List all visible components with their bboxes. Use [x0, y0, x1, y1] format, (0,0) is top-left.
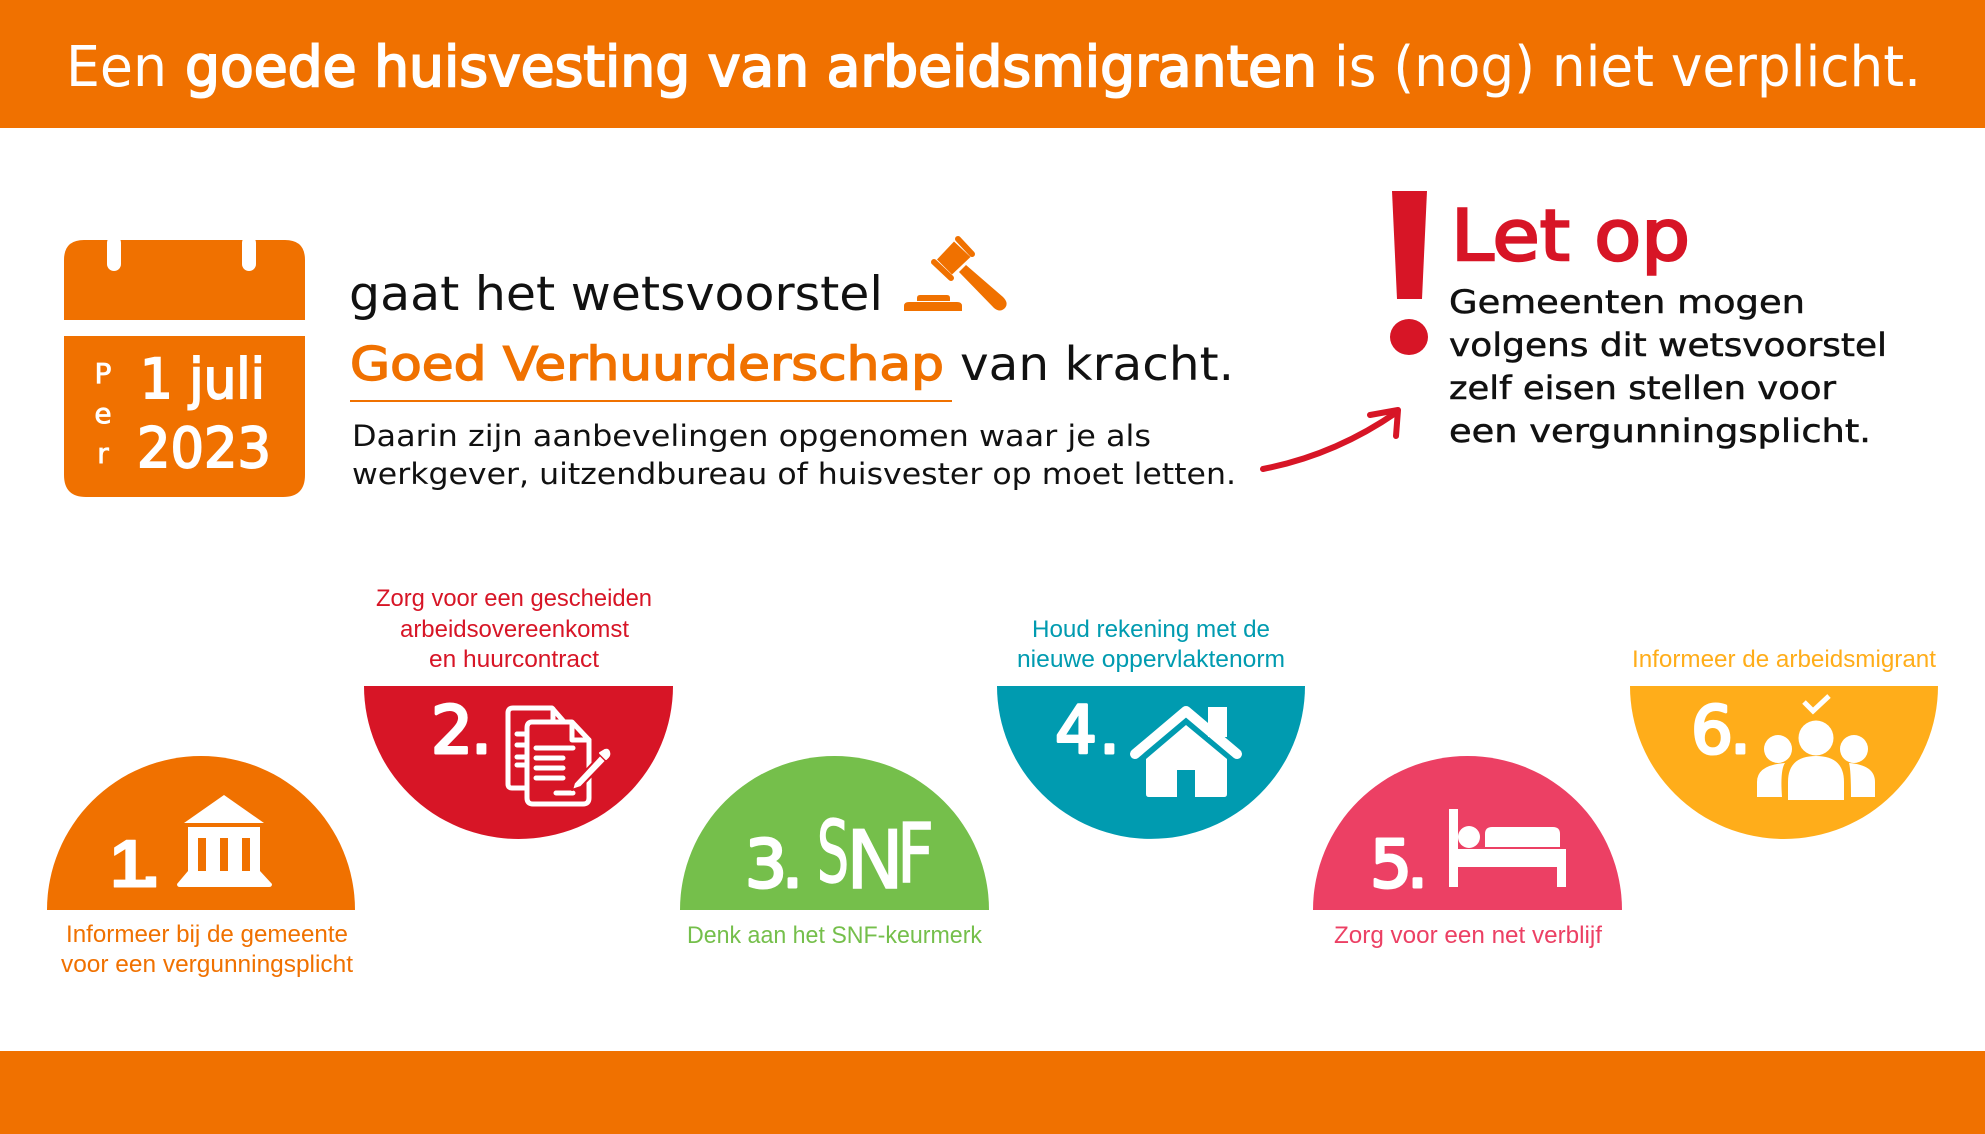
- label 4: [1017, 616, 1285, 673]
- vertical word Per: e: [94, 397, 112, 430]
- title: Een: [66, 35, 167, 100]
- vertical word Per: [94, 357, 112, 470]
- footer band: [0, 1051, 1985, 1134]
- logo: SNF: [817, 803, 934, 907]
- label 6: Informeer de arbeidsmigrant: [1632, 646, 1936, 673]
- arrow: [1263, 410, 1398, 469]
- logo: SNF: S: [817, 803, 849, 903]
- logo: SNF: N: [846, 814, 904, 907]
- label 1: Informeer bij de gemeente: [66, 921, 348, 948]
- icon: bed: [1449, 809, 1566, 887]
- date text: 2023: [137, 416, 271, 480]
- label 1: voor een vergunningsplicht: [61, 951, 353, 978]
- step 2: contracts: [364, 585, 673, 839]
- callout: let op: Let op: [1451, 195, 1690, 277]
- date text: 1 juli: [140, 347, 265, 411]
- text block: explanation: Daarin zijn aanbevelingen opgenomen waar je als: [352, 419, 1151, 453]
- step 3: SNF: [680, 756, 989, 949]
- icon: calendar with date: [64, 236, 305, 497]
- icon: gavel: [904, 239, 1007, 311]
- icon: government building: [177, 795, 272, 887]
- label 2: en huurcontract: [429, 646, 599, 673]
- icon: house: [1135, 707, 1237, 797]
- date text: [137, 347, 271, 480]
- label 2: Zorg voor een gescheiden: [376, 585, 652, 612]
- label 4: nieuwe oppervlaktenorm: [1017, 646, 1285, 673]
- callout text: volgens dit wetsvoorstel: [1449, 326, 1887, 364]
- label 1: [61, 921, 353, 978]
- heading: law proposal: gaat het wetsvoorstel: [349, 267, 883, 322]
- label 3: Denk aan het SNF-keurmerk: [687, 922, 983, 949]
- heading: law proposal: van kracht.: [960, 337, 1234, 391]
- title: is (nog) niet verplicht.: [1334, 35, 1921, 100]
- step 5: accommodation: [1313, 756, 1622, 949]
- step 6: inform the migrant: [1630, 646, 1938, 839]
- text block: explanation: [352, 419, 1236, 491]
- vertical word Per: r: [97, 437, 109, 470]
- number 4: 4.: [1055, 692, 1120, 769]
- number 1: 1.: [110, 826, 160, 902]
- heading: law proposal: Goed Verhuurderschap: [350, 337, 944, 391]
- callout text: Gemeenten mogen: [1449, 283, 1805, 321]
- title: [66, 35, 1921, 100]
- callout: let op: [1449, 195, 1887, 450]
- label 2: arbeidsovereenkomst: [400, 616, 629, 643]
- callout text: zelf eisen stellen voor: [1449, 369, 1837, 407]
- step 1: municipality: [47, 756, 355, 978]
- text block: explanation: werkgever, uitzendbureau of huisvester op moet letten.: [352, 457, 1236, 491]
- callout text: [1449, 283, 1887, 450]
- title: goede huisvesting van arbeidsmigranten: [185, 35, 1317, 100]
- step 4: housing: [997, 616, 1305, 839]
- label 5: Zorg voor een net verblijf: [1334, 922, 1602, 949]
- label 2: [376, 585, 652, 673]
- vertical word Per: P: [95, 357, 111, 390]
- number 3: 3.: [745, 826, 803, 903]
- icon: exclamation mark: [1390, 191, 1428, 355]
- label 4: Houd rekening met de: [1032, 616, 1270, 643]
- header banner: [0, 0, 1985, 128]
- callout text: een vergunningsplicht.: [1449, 412, 1871, 450]
- icon: documents and pen: [508, 708, 609, 804]
- heading: law proposal: [349, 267, 1234, 402]
- number 2: 2.: [431, 692, 492, 769]
- number 6: 6.: [1691, 692, 1751, 769]
- number 5: 5.: [1370, 826, 1428, 903]
- icon: people with check: [1757, 696, 1875, 800]
- logo: SNF: F: [897, 807, 934, 902]
